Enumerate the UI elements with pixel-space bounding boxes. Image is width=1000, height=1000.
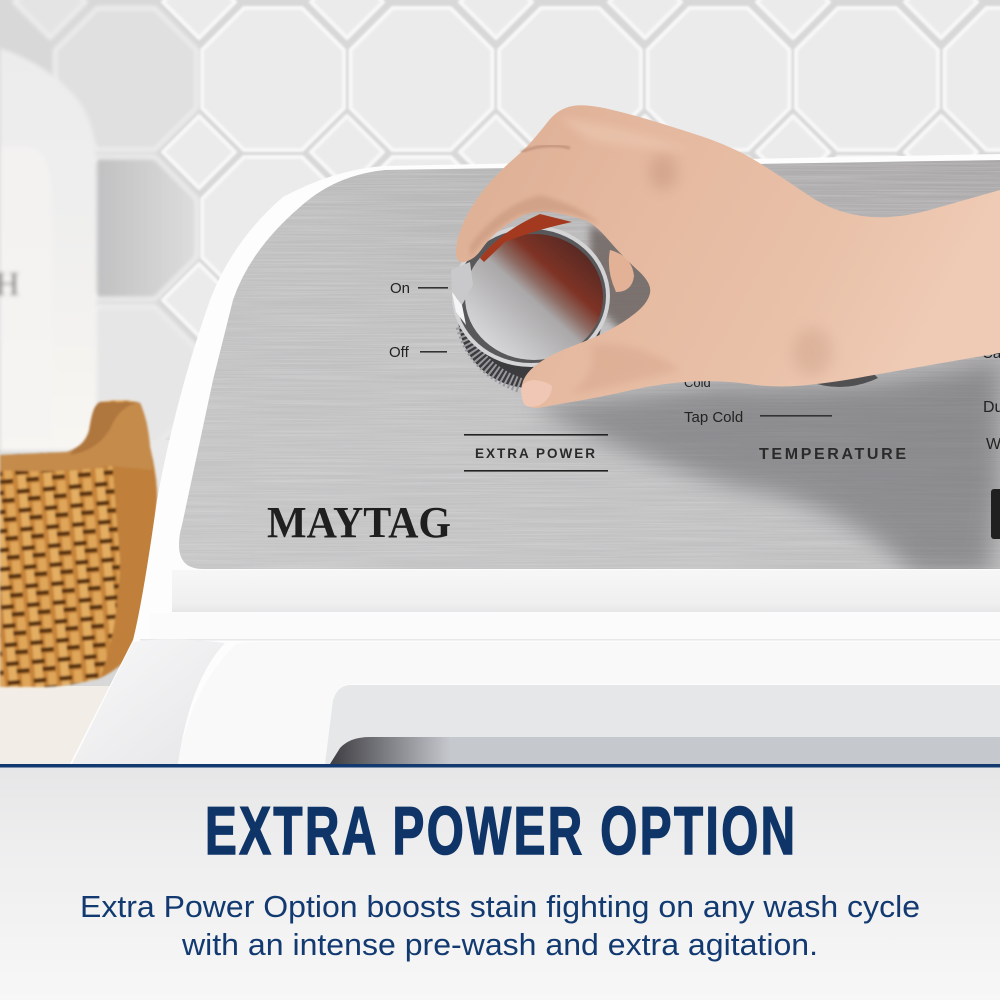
label: On xyxy=(390,283,448,293)
washer body: white top lid xyxy=(70,154,1000,764)
hand xyxy=(456,105,1000,408)
label: Temperature: TEMPERATURE xyxy=(759,446,906,463)
label: Tap Cold: Tap Cold xyxy=(684,409,743,426)
basket right side xyxy=(100,455,158,678)
second knob edge xyxy=(817,374,878,387)
stainless control panel xyxy=(170,150,1000,575)
heading: EXTRA POWER OPTION xyxy=(205,794,795,869)
fingernail xyxy=(521,380,552,407)
photo: washer control panel scene xyxy=(0,0,1000,764)
basket rim xyxy=(0,402,152,471)
lid left strip xyxy=(72,639,225,764)
wicker basket xyxy=(0,400,165,690)
right edge labels xyxy=(984,353,1000,539)
middle fingertip xyxy=(609,250,634,292)
thumb crease shading xyxy=(583,346,671,389)
description text xyxy=(80,889,920,962)
label: Off xyxy=(390,346,447,357)
label: On: On xyxy=(390,280,410,297)
bottom caption band xyxy=(0,764,1000,1000)
logo: Maytag: MAYTAG xyxy=(267,498,451,547)
knob: extra power dial xyxy=(451,225,610,388)
top highlight xyxy=(572,122,664,148)
wall: octagonal tile backdrop xyxy=(0,0,1000,764)
bottle xyxy=(0,48,97,451)
index finger shade xyxy=(470,195,594,254)
description text: Extra Power Option boosts stain fighting on any wash cycle xyxy=(80,889,920,924)
red reflection behind fingers xyxy=(480,214,572,262)
label: Off: Off xyxy=(389,344,410,361)
description text: with an intense pre-wash and extra agitation. xyxy=(181,927,818,962)
label: Tap Cold xyxy=(684,381,832,425)
label: Extra Power: EXTRA POWER xyxy=(475,446,595,461)
lid main xyxy=(178,642,1000,764)
trim band below panel xyxy=(172,579,1000,612)
panel labels xyxy=(267,280,1000,547)
counter top xyxy=(0,686,135,764)
hand shadow on panel xyxy=(530,360,1000,575)
finger separation shadow xyxy=(521,146,570,152)
knuckle shading xyxy=(649,154,677,190)
label: Tap Cold: Cold xyxy=(684,375,711,390)
lid window xyxy=(325,685,1000,764)
